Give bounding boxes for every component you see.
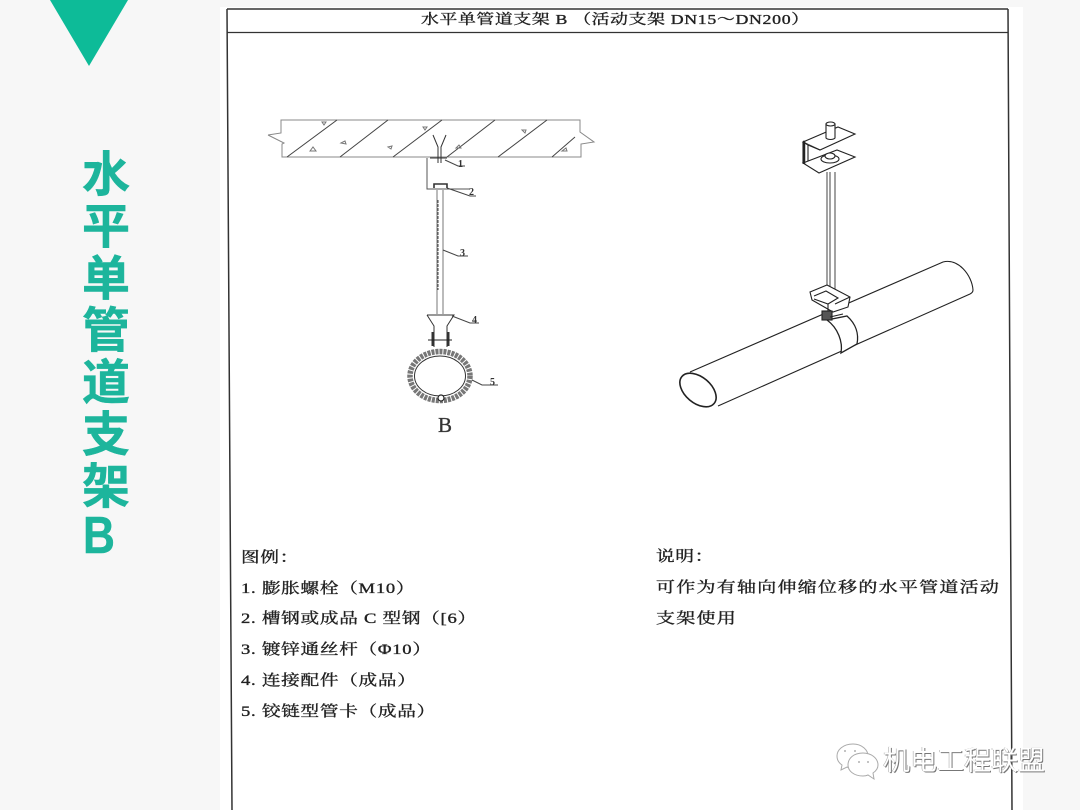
sheet title: 水平单管道支架 B （活动支架 DN15～DN200） bbox=[421, 13, 810, 28]
threaded rod bbox=[827, 172, 835, 292]
legend item 1: 1. 膨胀螺栓（M10） bbox=[241, 581, 415, 597]
pipe clamp ring bbox=[410, 352, 470, 401]
vertical title: 道 bbox=[82, 357, 130, 410]
sheet frame bbox=[226, 8, 1013, 810]
legend bbox=[241, 549, 477, 720]
number labels: 2 bbox=[469, 187, 474, 198]
concrete slab bbox=[268, 120, 594, 157]
number labels: 1 bbox=[458, 159, 463, 170]
description heading: 说明： bbox=[656, 549, 714, 565]
lower connector bbox=[810, 285, 850, 320]
icon: chat bubbles bbox=[836, 744, 878, 780]
description bbox=[656, 548, 1000, 627]
vertical title: 支 bbox=[82, 409, 130, 462]
description text: 支架使用 bbox=[656, 611, 737, 627]
number labels: 4 bbox=[472, 315, 477, 326]
diagram: isometric view bbox=[679, 122, 974, 408]
vertical title: B bbox=[83, 507, 115, 565]
watermark text: 机电工程联盟 bbox=[883, 746, 1045, 776]
legend item 5: 5. 铰链型管卡（成品） bbox=[241, 704, 436, 720]
pipe clamp band bbox=[827, 316, 858, 353]
legend heading: 图例： bbox=[241, 550, 299, 566]
pipe bbox=[674, 261, 973, 413]
description text: 可作为有轴向伸缩位移的水平管道活动 bbox=[656, 580, 1000, 596]
vertical title: 单 bbox=[82, 253, 130, 306]
number labels bbox=[458, 159, 495, 388]
icon: green downward triangle bbox=[50, 0, 128, 66]
panel: drawing sheet bbox=[220, 7, 1023, 810]
leader lines bbox=[443, 160, 498, 385]
watermark bbox=[836, 744, 1045, 780]
legend item 4: 4. 连接配件（成品） bbox=[241, 673, 417, 689]
number labels: 5 bbox=[490, 377, 495, 388]
threaded rod bbox=[437, 190, 443, 314]
legend item 2: 2. 槽钢或成品 C 型钢（[6） bbox=[241, 611, 477, 627]
vertical title: 水 bbox=[82, 149, 130, 202]
legend item 3: 3. 镀锌通丝杆（Φ10） bbox=[241, 642, 432, 658]
label B: B bbox=[438, 413, 452, 437]
vertical title bbox=[82, 149, 130, 565]
expansion bolt bbox=[430, 135, 447, 163]
description text bbox=[656, 579, 1000, 627]
vertical title: 平 bbox=[82, 201, 130, 254]
upper channel bracket bbox=[803, 122, 855, 173]
connector fitting bbox=[427, 315, 454, 347]
diagram: section view bbox=[268, 120, 596, 437]
number labels: 3 bbox=[460, 248, 465, 259]
vertical title: 管 bbox=[82, 305, 130, 358]
channel bracket bbox=[427, 158, 470, 189]
vertical title: 架 bbox=[82, 461, 130, 514]
